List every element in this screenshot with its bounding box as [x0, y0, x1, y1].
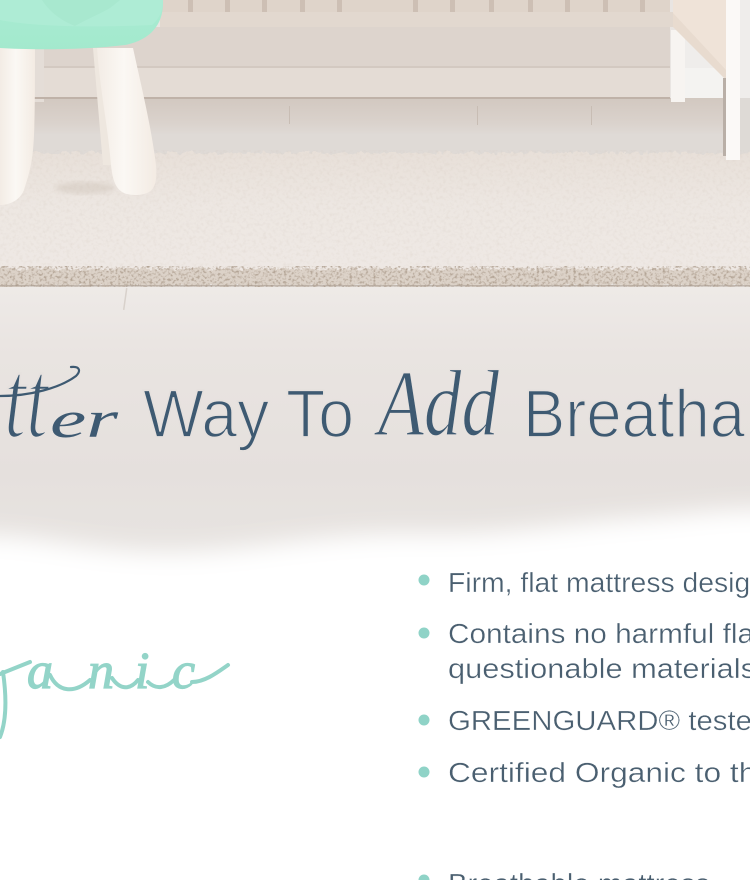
white cloud fade at bottom of the photo [0, 509, 750, 880]
bullet: no harmful flame retardants [418, 618, 750, 684]
bullet list: mattress benefits [418, 567, 750, 880]
heading: a better way to add breathable [0, 338, 745, 462]
heading script word: Better [0, 338, 119, 462]
crib corner and legs [671, 0, 750, 152]
lower floor [0, 287, 750, 597]
bullet: no harmful flame retardants: questionable materials [448, 653, 750, 684]
crib base panel [34, 0, 673, 102]
stool legs [0, 48, 156, 205]
stool seat [0, 0, 163, 49]
shaggy rug [0, 150, 750, 287]
stool shadows on rug [55, 182, 115, 194]
bullet: greenguard tested: GREENGUARD® teste [448, 705, 750, 736]
heading script word: Add: Add [373, 352, 500, 456]
crib post over rug [723, 0, 740, 160]
heading script word: Better: tt [4, 338, 50, 462]
floorboard seams [289, 106, 592, 125]
heading script word: Better: er [50, 392, 119, 449]
photo: nursery floor scene [0, 0, 750, 597]
bullet: no harmful flame retardants: Contains no harmful fla [448, 618, 750, 649]
bullet: certified organic: Certified Organic to the [448, 757, 750, 788]
floor behind rug [0, 98, 750, 160]
script word: Organic [0, 643, 228, 737]
heading words: Way To: Way To [143, 376, 354, 452]
